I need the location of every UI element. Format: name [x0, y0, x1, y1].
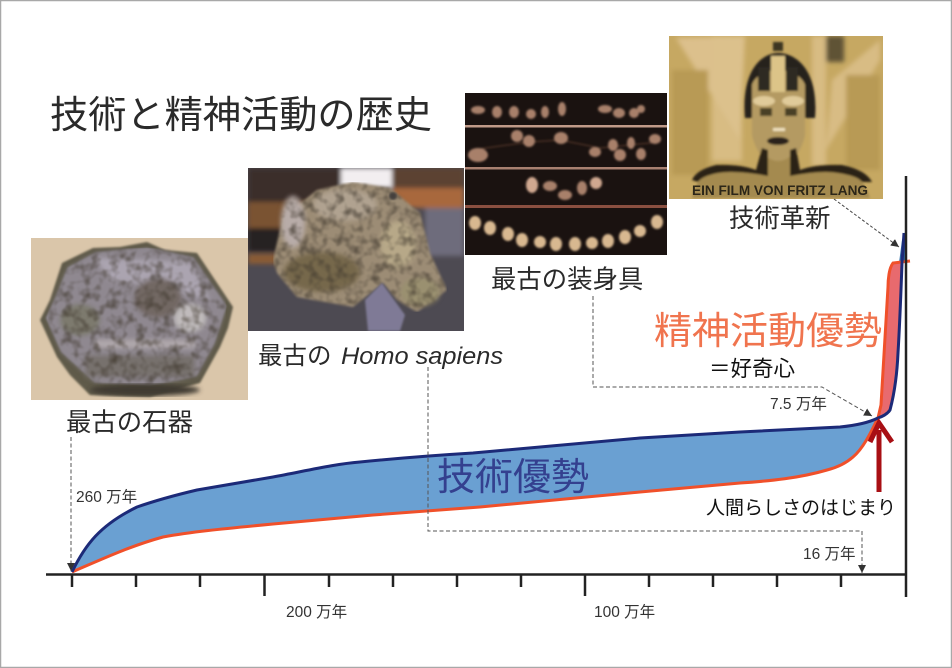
dashed leader: ornaments to 7.5: [593, 296, 872, 416]
label: curiosity: ＝好奇心: [709, 357, 795, 381]
label: 16: 16 万年: [803, 545, 856, 563]
photo: oldest ornaments (bead strings): [465, 93, 667, 255]
label: 260: 260 万年: [76, 488, 137, 506]
label: oldest Homo sapiens: 最古の: [258, 342, 332, 370]
title: 技術と精神活動の歴史: [50, 94, 432, 137]
curve: orange lower: [72, 261, 910, 572]
label: 7.5: 7.5 万年: [770, 395, 827, 413]
label: 100: 100 万年: [594, 603, 655, 621]
area: top tip: [899, 232, 905, 263]
heading: mental activity dominant: 精神活動優勢: [654, 311, 882, 353]
dashed leader: innovation: [834, 199, 899, 247]
label: technological innovation: 技術革新: [729, 205, 831, 233]
area: technology dominant: [72, 418, 878, 572]
area: mental activity dominant: [878, 263, 902, 418]
label: oldest Homo sapiens: [258, 342, 503, 370]
photo: oldest stone tool: [31, 238, 248, 400]
photo: Metropolis poster: [669, 36, 883, 199]
label: start of humanity: 人間らしさのはじまり: [706, 498, 896, 519]
dashed leader: Homo sapiens to 16: [428, 367, 862, 573]
heading: technology dominant: 技術優勢: [437, 457, 589, 499]
label: oldest ornaments: 最古の装身具: [491, 266, 643, 294]
dashed leader: stone tool to 260: [70, 437, 72, 571]
arrow: start of humanity: [870, 423, 892, 492]
poster text: EIN FILM VON FRITZ LANG: [692, 182, 868, 198]
curve: navy upper: [72, 233, 904, 572]
label: oldest Homo sapiens: Homo sapiens: [341, 343, 503, 370]
chart: timeline of technology vs mental activity: [46, 176, 910, 597]
label: 200: 200 万年: [286, 603, 347, 621]
photo: oldest Homo sapiens skull: [248, 168, 464, 331]
label: oldest stone tool: 最古の石器: [66, 409, 193, 437]
axis ticks: [72, 574, 841, 596]
axes: [46, 176, 907, 597]
